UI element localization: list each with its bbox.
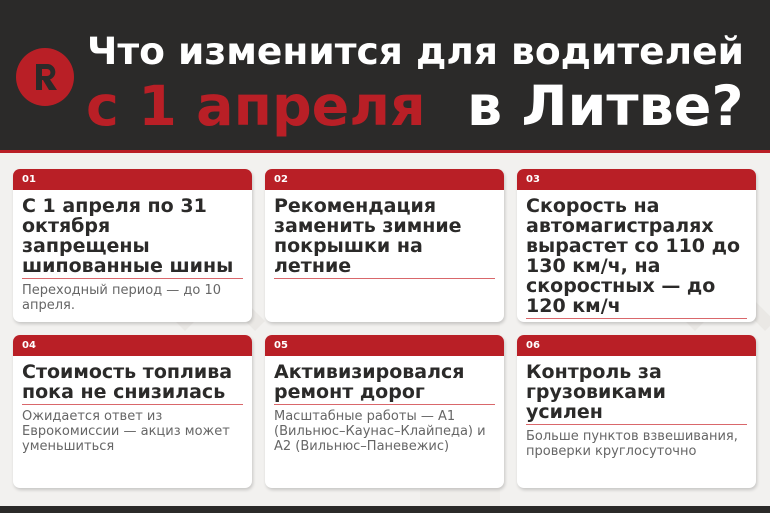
card 03 <box>517 169 756 322</box>
card 06 title <box>526 362 747 425</box>
card 05: 05 <box>274 340 288 351</box>
footer bar <box>0 506 770 513</box>
card 06 <box>517 335 756 488</box>
card 04 <box>13 335 252 488</box>
title highlight: с 1 апреля <box>86 74 426 139</box>
card 01: 01 <box>22 174 36 185</box>
card 06: 06 <box>526 340 540 351</box>
card 01 <box>13 169 252 322</box>
card 03 title: Скорость на автомагистралях вырастет со 110 до 130 км/ч, на скоростных — до 120 км/ч <box>526 195 740 317</box>
card 02 title: Рекомендация заменить зимние покрышки на летние <box>274 195 462 277</box>
card 05 <box>265 335 504 488</box>
logo icon <box>16 48 74 106</box>
card 06 text: Больше пунктов взвешивания, проверки круглосуточно <box>526 429 738 459</box>
card 05 text: Масштабные работы — A1 (Вильнюс–Каунас–Клайпеда) и A2 (Вильнюс–Паневежис) <box>274 409 486 454</box>
title line 1: Что изменится для водителей <box>87 29 744 73</box>
card 01 text: Переходный период — до 10 апреля. <box>22 283 221 313</box>
card 04 text: Ожидается ответ из Еврокомиссии — акциз может уменьшиться <box>22 409 230 454</box>
card 02 <box>265 169 504 322</box>
header <box>0 0 770 153</box>
card 05 title: Активизировался ремонт дорог <box>274 361 464 403</box>
card 01 title: С 1 апреля по 31 октября запрещены шипованные шины <box>22 195 233 277</box>
card 02: 02 <box>274 174 288 185</box>
card 03: 03 <box>526 174 540 185</box>
card 04 title: Стоимость топлива пока не снизилась <box>22 361 232 403</box>
background decoration <box>177 302 770 330</box>
title line 2: в Литве? <box>467 74 744 139</box>
card 04: 04 <box>22 340 36 351</box>
card 06 title: Контроль за грузовиками усилен <box>526 361 666 423</box>
